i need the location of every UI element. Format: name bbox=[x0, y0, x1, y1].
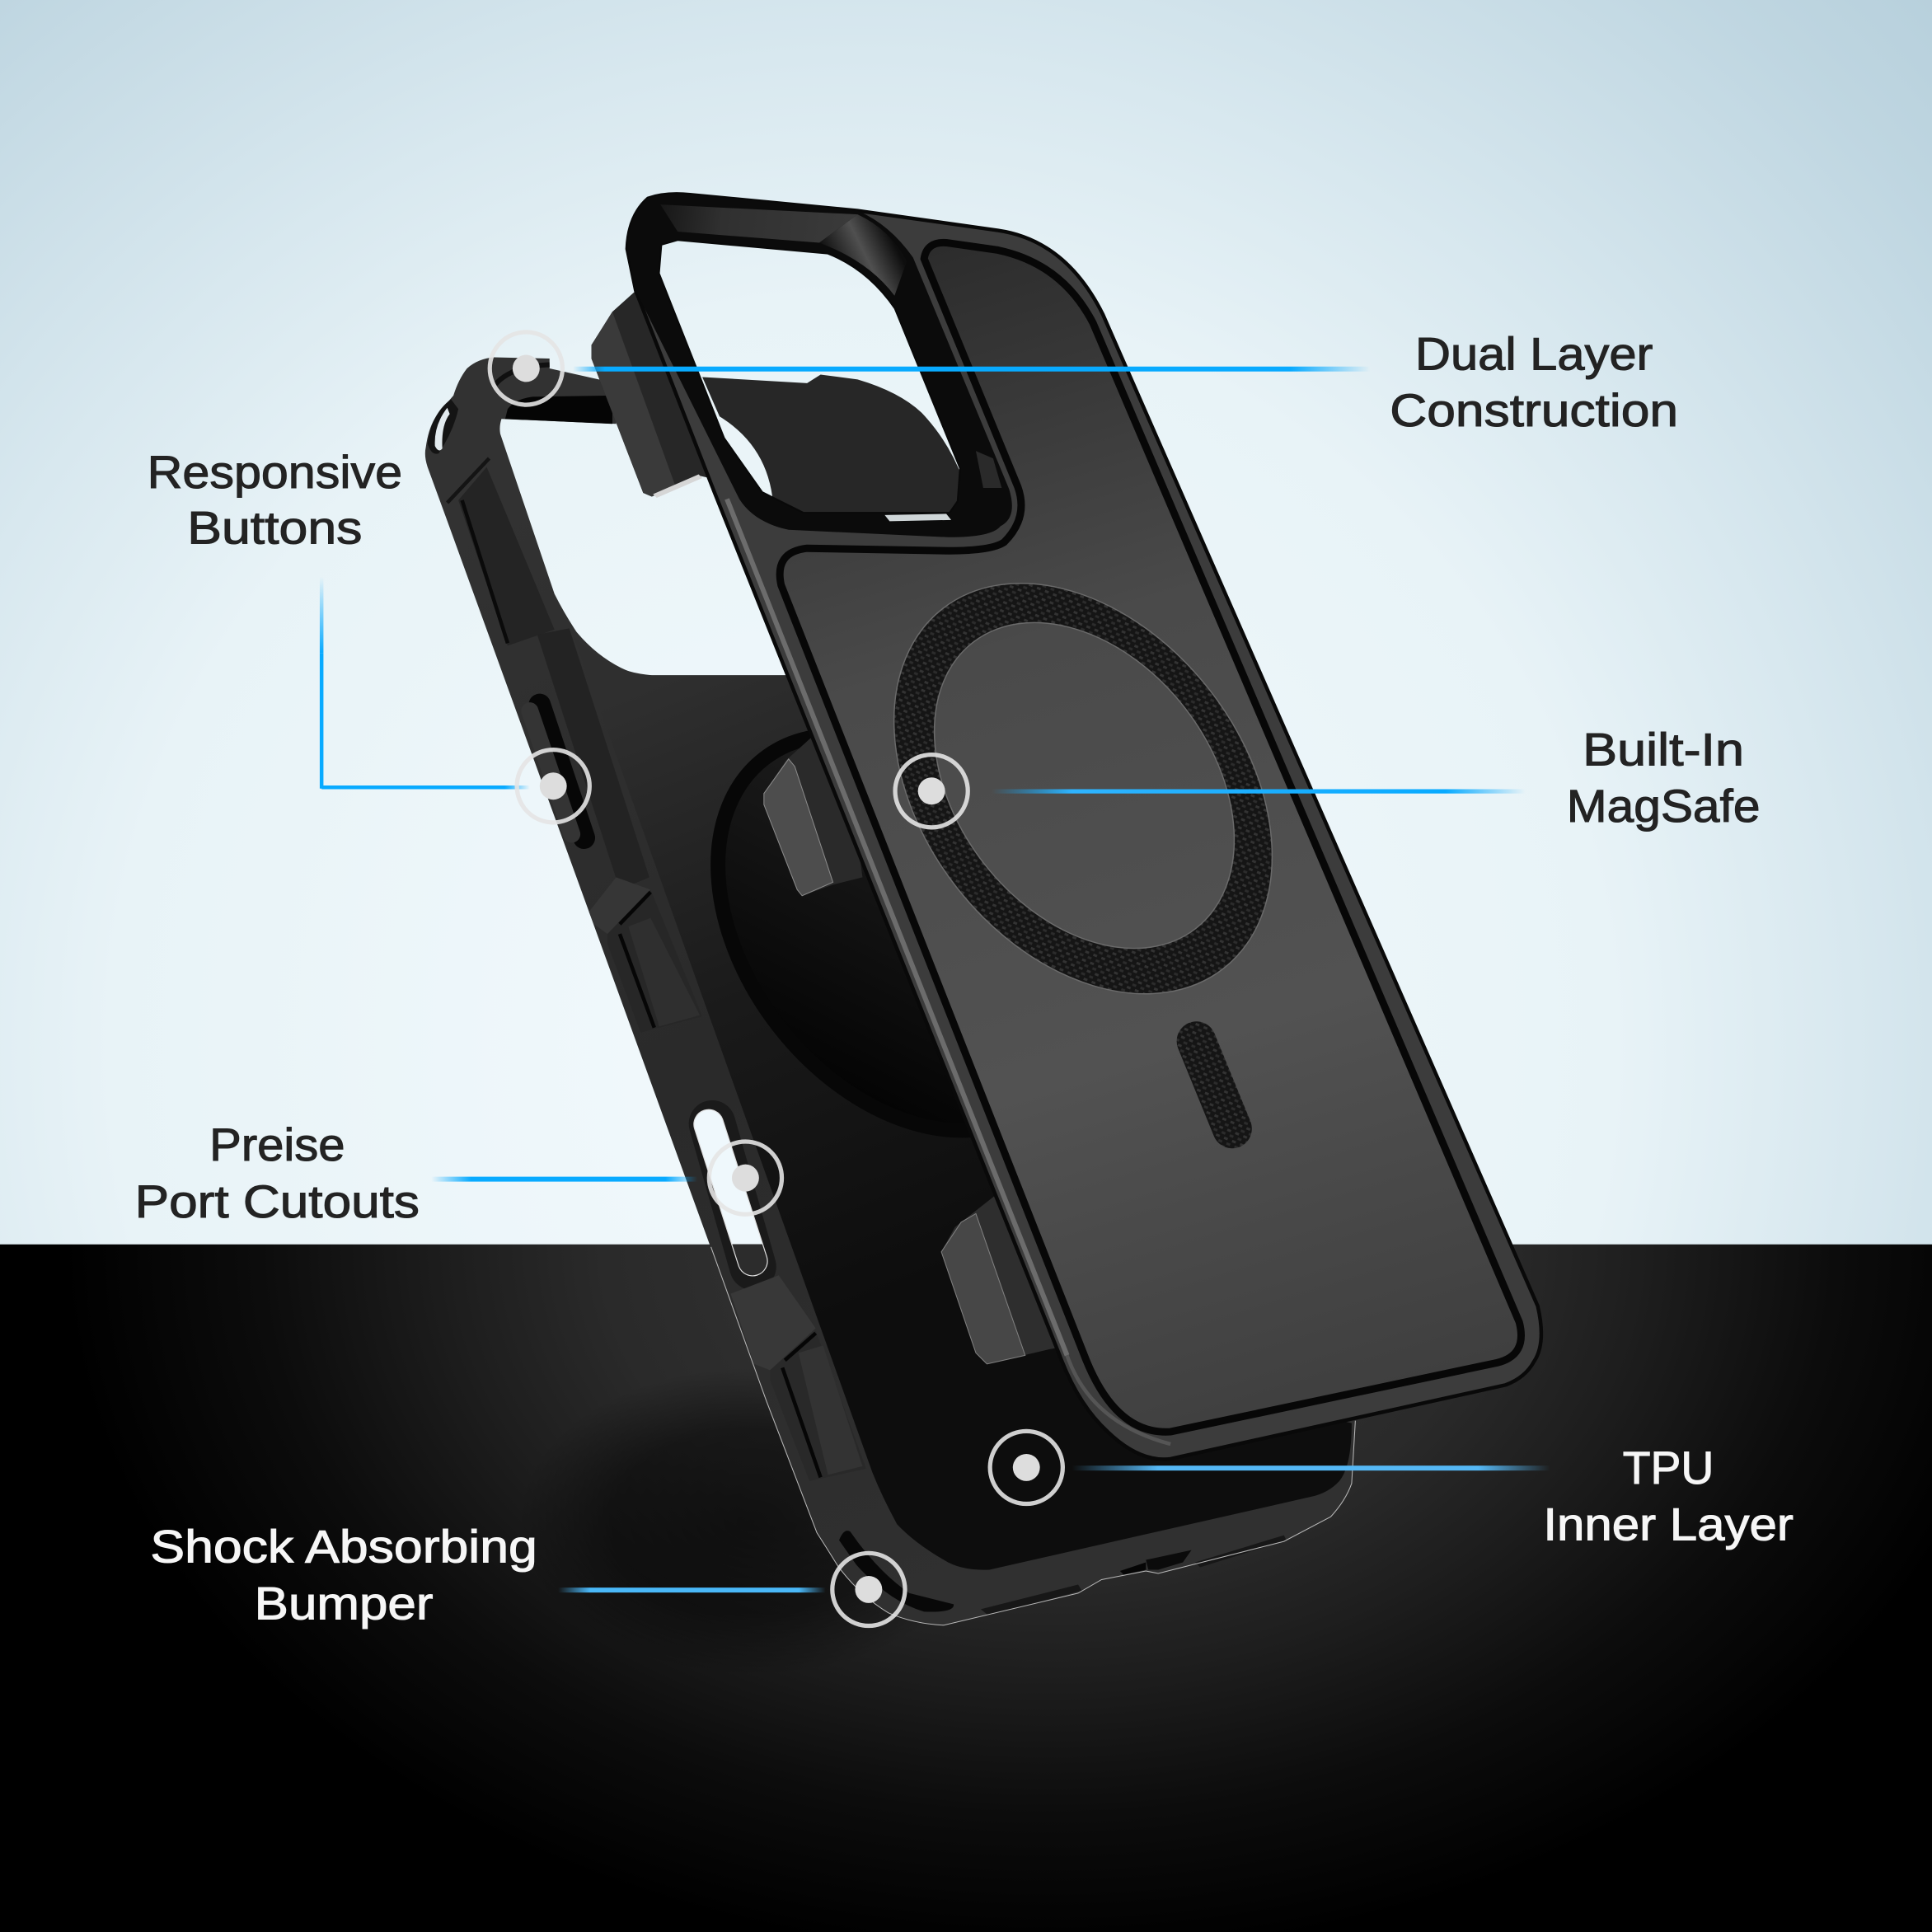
label: Shock Absorbing Bumper bbox=[150, 1522, 537, 1629]
camera ring: black frame bbox=[627, 194, 1012, 537]
camera ring: top inner face bbox=[660, 204, 857, 242]
bumper: bottom port slots bbox=[981, 1536, 1287, 1615]
bumper: port cutout bbox=[694, 1109, 767, 1276]
label: TPU Inner Layer: TPU bbox=[1623, 1442, 1714, 1494]
bumper: upper bevel highlight bbox=[589, 877, 650, 934]
bumper: dark inner band bbox=[537, 628, 649, 889]
TPU inner layer: side lens cutout bbox=[428, 399, 458, 454]
label: Preise Port Cutouts bbox=[135, 1119, 420, 1227]
bumper: light edge line bbox=[711, 1247, 1355, 1625]
front shell: left rim highlight bbox=[727, 499, 1170, 1444]
marker: TPU inner layer bbox=[990, 1431, 1062, 1504]
line: responsive buttons bbox=[320, 577, 530, 789]
bumper: bottom corner opening bbox=[839, 1531, 954, 1612]
background: dark floor bbox=[0, 1245, 1932, 1932]
label: Dual Layer Construction bbox=[1390, 328, 1678, 436]
line: dual layer bbox=[573, 367, 1370, 372]
front shell: body bbox=[627, 194, 1541, 1459]
marker: built-in magsafe bbox=[895, 755, 968, 828]
callout lines bbox=[320, 367, 1550, 1592]
bumper: lower recess bbox=[770, 1330, 866, 1481]
label: Built-In MagSafe: MagSafe bbox=[1567, 781, 1760, 832]
camera ring: corner gloss bbox=[819, 214, 907, 296]
line: port cutouts bbox=[431, 1177, 697, 1182]
magsafe alignment pill bbox=[1197, 1041, 1232, 1128]
TPU inner layer: inner ring bbox=[643, 665, 1156, 1201]
marker: port cutouts bbox=[709, 1142, 782, 1214]
bumper: upper recess bbox=[448, 458, 555, 645]
label: Responsive Buttons: Buttons bbox=[187, 502, 363, 553]
label: TPU Inner Layer: Inner Layer bbox=[1543, 1499, 1794, 1550]
line: shock absorbing bumper bbox=[558, 1587, 826, 1592]
label: TPU Inner Layer bbox=[1543, 1442, 1794, 1550]
label: Responsive Buttons: Responsive bbox=[148, 447, 402, 498]
marker: dual layer bbox=[490, 332, 562, 405]
front shell: main panel bbox=[780, 242, 1521, 1432]
label: Preise Port Cutouts: Port Cutouts bbox=[135, 1176, 420, 1227]
clip: top tab bbox=[592, 291, 732, 498]
background: sky bbox=[0, 0, 1932, 1245]
label: Shock Absorbing Bumper: Bumper bbox=[255, 1578, 433, 1629]
label: Responsive Buttons bbox=[148, 447, 402, 553]
label: Built-In MagSafe: Built-In bbox=[1583, 724, 1744, 775]
label: Dual Layer Construction: Construction bbox=[1390, 385, 1678, 436]
camera ring bbox=[627, 194, 1012, 537]
label: Built-In MagSafe bbox=[1567, 724, 1760, 832]
bumper: button recess bbox=[530, 705, 584, 838]
label: Dual Layer Construction: Dual Layer bbox=[1415, 328, 1653, 379]
marker: responsive buttons bbox=[517, 750, 589, 823]
clip: middle tab bbox=[764, 727, 862, 896]
bumper: top channel bbox=[495, 364, 550, 384]
marker: shock absorbing bumper bbox=[832, 1553, 905, 1626]
camera ring: bottom glints bbox=[884, 513, 951, 521]
camera ring: right lower highlight bbox=[976, 451, 1001, 488]
magsafe ring bbox=[894, 584, 1272, 994]
TPU inner layer: interior surface bbox=[573, 635, 1352, 1570]
TPU inner layer: bumper body bbox=[425, 358, 1355, 1625]
label: Shock Absorbing Bumper: Shock Absorbing bbox=[150, 1522, 537, 1573]
line: built-in magsafe bbox=[992, 789, 1526, 794]
bumper: lower bevel highlight bbox=[730, 1275, 816, 1370]
line: TPU inner layer bbox=[1072, 1465, 1550, 1470]
clip: lower tab bbox=[941, 1183, 1085, 1364]
TPU inner layer: back plate behind camera bbox=[702, 374, 964, 518]
bumper: middle recess bbox=[607, 889, 702, 1033]
TPU inner layer: top bar slot bbox=[505, 396, 612, 424]
label: Preise Port Cutouts: Preise bbox=[209, 1119, 345, 1170]
phone case illustration bbox=[425, 194, 1541, 1625]
